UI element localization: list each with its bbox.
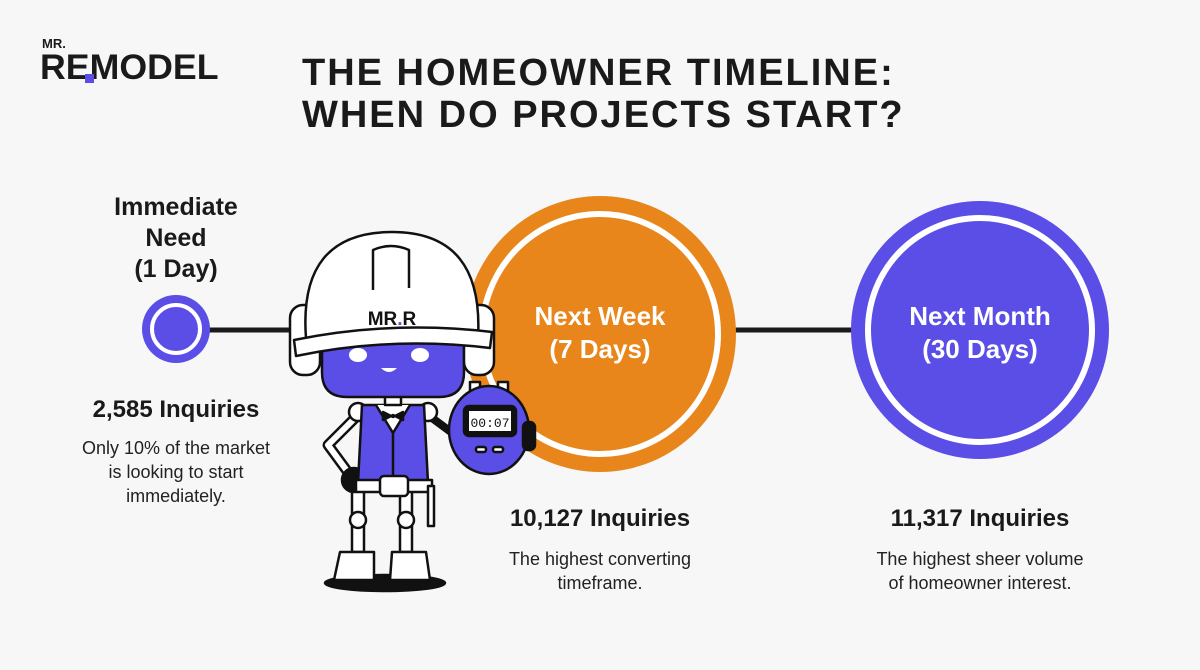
- legs: [352, 490, 364, 552]
- helmet: [305, 232, 478, 338]
- node: next month: [851, 201, 1109, 459]
- label: immediate: Need: [145, 224, 207, 252]
- node: immediate: [142, 295, 210, 363]
- arms: [328, 415, 358, 475]
- stat: immediate: [82, 396, 270, 506]
- label: next week: (7 Days): [549, 334, 651, 364]
- logo: MR.: [42, 36, 66, 51]
- label: next month: Next Month: [909, 301, 1051, 331]
- body vest: [358, 405, 428, 483]
- shadow: [325, 575, 445, 591]
- label: immediate: Immediate: [114, 193, 238, 221]
- label: next week: [534, 301, 666, 364]
- stopwatch: 00:07: [470, 416, 510, 431]
- stat: next month: of homeowner interest.: [888, 573, 1072, 593]
- stat: next week: timeframe.: [557, 573, 643, 593]
- stat: next month: The highest sheer volume: [876, 549, 1084, 569]
- neck: [385, 390, 401, 405]
- logo: REMODEL: [40, 48, 218, 87]
- stat: next week: The highest converting: [509, 549, 691, 569]
- node: next week: [470, 196, 736, 472]
- label: next month: [909, 301, 1051, 364]
- belt: [356, 480, 432, 492]
- stat: immediate: 2,585 Inquiries: [93, 396, 259, 423]
- title: THE HOMEOWNER TIMELINE:: [302, 52, 895, 94]
- head: [322, 340, 464, 397]
- stat: immediate: immediately.: [126, 486, 226, 506]
- label: next month: (30 Days): [922, 334, 1038, 364]
- ear muffs: [290, 305, 320, 375]
- stat: immediate: is looking to start: [108, 462, 244, 482]
- stat: next month: 11,317 Inquiries: [891, 505, 1069, 532]
- stat: next week: 10,127 Inquiries: [510, 505, 690, 532]
- title: [302, 52, 905, 136]
- label: immediate: (1 Day): [134, 255, 218, 283]
- robot mascot: MR.R: [368, 309, 417, 330]
- stat: next month: [876, 505, 1084, 593]
- robot mascot: [288, 230, 536, 592]
- title: WHEN DO PROJECTS START?: [302, 94, 905, 136]
- stopwatch: [449, 382, 535, 474]
- label: immediate: [114, 193, 238, 283]
- label: next week: Next Week: [534, 301, 666, 331]
- stat: next week: [509, 505, 691, 593]
- stat: immediate: Only 10% of the market: [82, 438, 270, 458]
